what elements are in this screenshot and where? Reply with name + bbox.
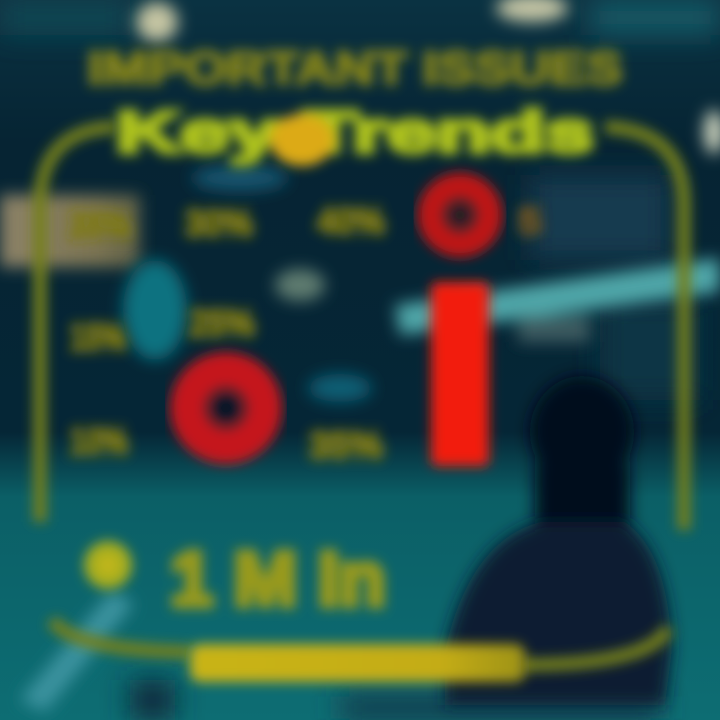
yellow data labels: 20% [69, 205, 131, 247]
yellow data labels: 5 [518, 201, 542, 243]
bottom yellow bar [190, 644, 525, 682]
person silhouette [445, 376, 672, 705]
title line one: IMPORTANT ISSUES [88, 42, 622, 94]
yellow data labels: 25% [189, 303, 255, 345]
yellow data labels: 40% [317, 201, 385, 243]
donut chart: upper right [431, 186, 489, 244]
title line two [116, 100, 594, 166]
red bar [431, 282, 489, 466]
bottom icon [84, 541, 132, 589]
top lights [136, 0, 720, 154]
bottom large figures: 1 M In [170, 537, 386, 622]
rounded frame [40, 127, 684, 665]
yellow data labels: 10% [70, 421, 128, 463]
teal light shapes [20, 165, 720, 712]
left beige panel [0, 195, 140, 267]
yellow data labels: 15% [70, 317, 126, 359]
donut chart: lower left [188, 370, 264, 446]
title line two: Key Trends [116, 100, 594, 165]
yellow data labels: 35% [309, 425, 383, 467]
yellow data labels: 30% [185, 203, 253, 245]
yellow data labels [69, 201, 542, 467]
